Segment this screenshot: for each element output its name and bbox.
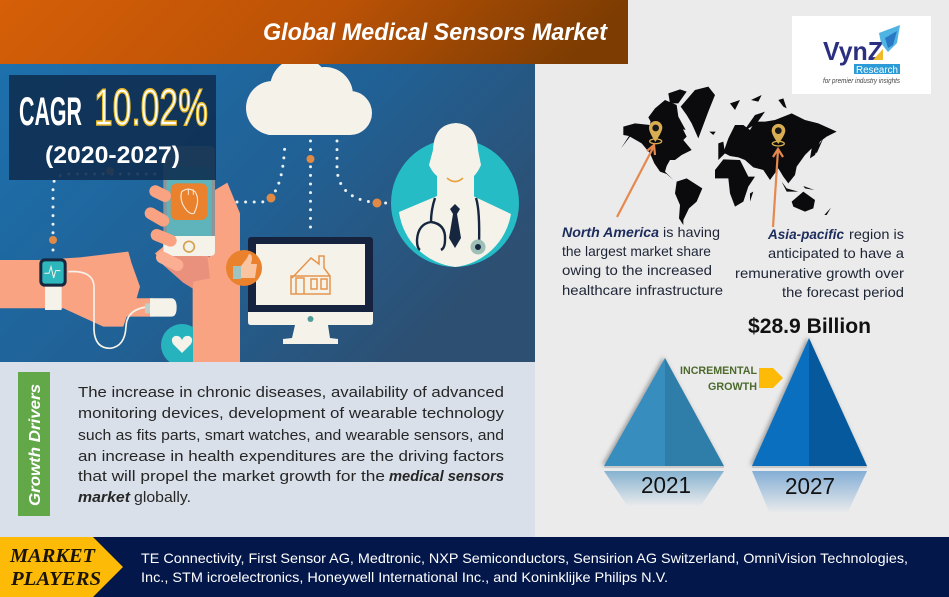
text block: growth drivers description: an increase in health expenditures are the driving factors [78,448,504,465]
text block: North America: healthcare infrastructure [562,282,723,298]
arrow: North America callout [617,145,655,217]
text block: North America: North America [562,224,659,240]
label: growth drivers [18,372,50,516]
panel: CAGR callout: 10.02% [94,79,208,137]
text block: North America: the largest market share [562,243,711,259]
pyramid: 2027 [750,337,867,514]
text block: North America [562,224,723,298]
panel: CAGR callout: CAGR [19,90,82,134]
text block: company list: Inc., STM icroelectronics, Honeywell International Inc., and Koninklijke Philips N.V. [141,569,668,585]
text block: growth drivers description: medical sensors [389,468,504,485]
footer: market players [0,537,949,597]
title banner: Global Medical Sensors Market [263,19,608,46]
text block: company list [141,550,908,585]
icon: thumbs up badge [226,250,262,286]
dotted connector lines [53,141,386,250]
text block: North America: owing to the increased [562,262,712,278]
text block: growth drivers description: globally. [134,489,191,506]
incremental growth label [680,365,757,393]
text block: growth drivers description: The increase in chronic diseases, availability of advanced [78,384,504,401]
logo: VynZ Research: Research [856,65,898,76]
logo: VynZ Research: for premier industry insights [823,78,900,85]
world map [621,87,837,225]
map pin: North America [649,121,662,144]
text block: growth drivers description: monitoring devices, development of wearable technology [78,405,505,422]
text block: growth drivers description: such as fits parts, smart watches, and wearable sensors, and [78,427,504,444]
icon: heart badge [161,324,193,362]
text block: North America: is having [663,224,720,240]
text block: Asia-Pacific: anticipated to have a [768,245,904,261]
incremental growth label: INCREMENTAL [680,365,757,377]
label: growth drivers: Growth Drivers [27,384,44,506]
logo: VynZ Research: VynZ [823,36,883,66]
text block: Asia-Pacific: region is [849,226,904,242]
arrow: incremental growth [759,368,783,388]
text block: growth drivers description: market [78,489,131,506]
pyramid: 2021 [602,357,724,507]
incremental growth label: GROWTH [708,381,757,393]
logo: VynZ Research [792,16,931,94]
icon: cloud [246,58,372,135]
text block: Asia-Pacific [735,226,904,300]
illustration: connected health [0,58,535,366]
market players tag [0,537,123,597]
text block: growth drivers description: that will propel the market growth for the [78,468,385,485]
right background panel [535,0,949,537]
title banner [0,0,628,64]
panel: growth drivers [0,362,535,537]
pyramid: 2021: 2021 [641,472,691,498]
panel: CAGR callout: (2020-2027) [45,142,180,169]
icon: hand holding smartphone [144,146,240,328]
market players tag: PLAYERS [10,568,101,590]
text block: company list: TE Connectivity, First Sensor AG, Medtronic, NXP Semiconductors, Sensirion AG Switzerland, OmniVision Technologies, [141,550,908,566]
map pin: Asia-Pacific [772,124,785,146]
market players tag: MARKET [9,545,96,567]
panel: CAGR callout [9,75,216,180]
icon: doctor avatar [391,123,519,267]
text block: Asia-Pacific: remunerative growth over [735,265,904,281]
pyramid: 2027: 2027 [785,473,835,499]
icon: arm with smartwatch [0,252,177,348]
icon: desktop monitor with house [248,237,373,344]
arrow: Asia-Pacific callout [773,149,783,227]
value label: $28.9 Billion: $28.9 Billion [748,315,871,338]
text block: Asia-Pacific: the forecast period [782,284,904,300]
text block: Asia-Pacific: Asia-pacific [767,226,844,242]
text block: growth drivers description [78,384,505,506]
